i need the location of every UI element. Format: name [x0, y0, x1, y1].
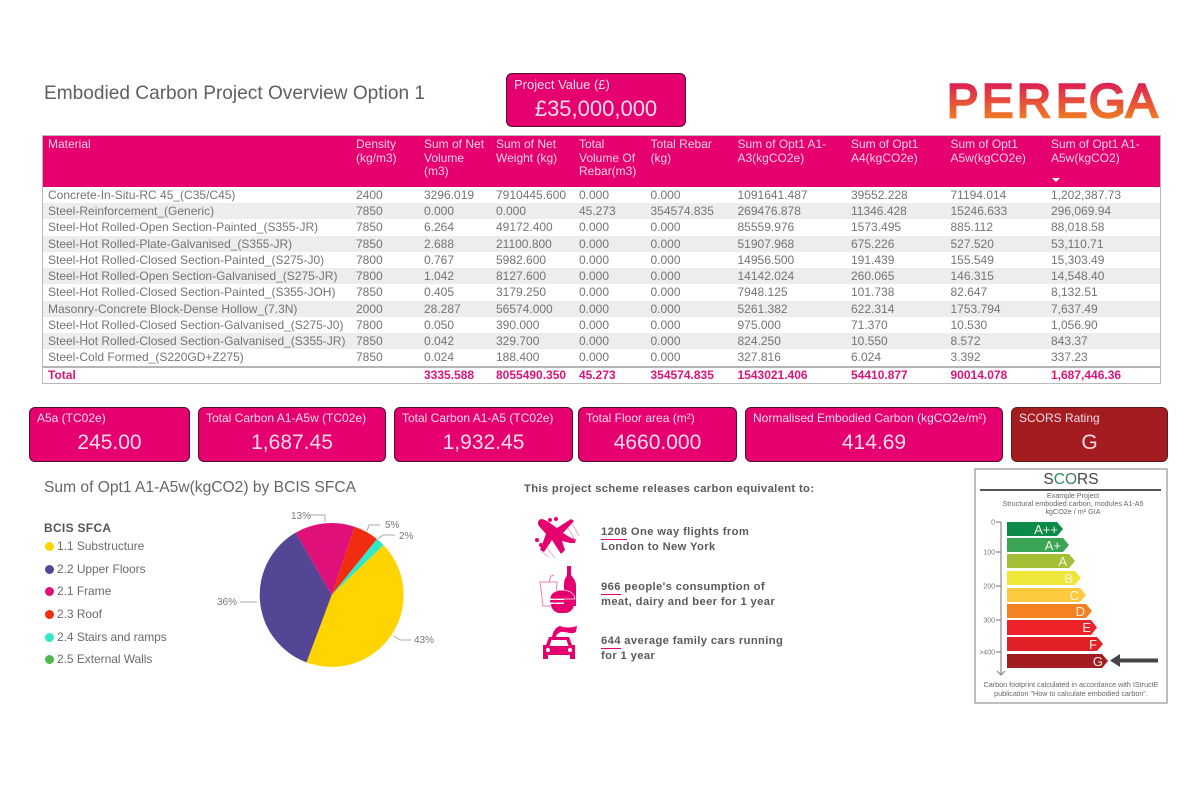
table rows: 7850: [356, 334, 383, 348]
table rows: 11346.428: [851, 204, 907, 218]
card: A5a: 245.00: [77, 431, 142, 454]
rating bars: B: [1064, 571, 1073, 586]
table rows: 7800: [356, 268, 383, 282]
panel: SCORS rating chart: Structural embodied carbon, modules A1-A5: [1002, 499, 1144, 508]
table rows: 2.688: [424, 236, 454, 250]
table rows: 7800: [356, 318, 383, 332]
table header: Sum of Opt1 A5w(kgCO2e): [950, 137, 1026, 164]
card: total floor area: 4660.000: [614, 431, 701, 454]
table rows: 824.250: [738, 334, 781, 348]
card: total carbon A1-A5w: Total Carbon A1-A5w (TC02e): [206, 411, 366, 425]
panel: SCORS rating chart: 200: [983, 584, 995, 590]
table rows: Masonry-Concrete Block-Dense Hollow_(7.3N): [48, 302, 297, 316]
rating bars: [1007, 522, 1108, 669]
card: project value: £35,000,000: [535, 96, 657, 120]
table rows: 1,056.90: [1051, 318, 1098, 332]
panel: SCORS rating chart: 0: [991, 520, 995, 526]
axis: [996, 522, 1005, 675]
table rows: 8,132.51: [1051, 284, 1098, 298]
table rows: 101.738: [851, 284, 894, 298]
table rows: 329.700: [496, 334, 539, 348]
table rows: 0.000: [650, 318, 681, 332]
legend: [44, 521, 167, 666]
card: project value: Project Value (£): [514, 76, 610, 92]
table rows: 0.767: [424, 252, 454, 266]
table rows: Steel-Cold Formed_(S220GD+Z275): [48, 350, 244, 364]
equivalent: flights: One way flights from: [631, 526, 749, 538]
table rows: 1.042: [424, 268, 454, 282]
panel: materials table border: [42, 135, 1161, 384]
table rows: 0.000: [579, 284, 609, 298]
table rows: 188.400: [496, 350, 539, 364]
table rows: Steel-Hot Rolled-Plate-Galvanised_(S355-JR): [48, 236, 292, 250]
table rows: 0.000: [579, 268, 609, 282]
table rows: 14956.500: [738, 252, 794, 266]
table rows: 296,069.94: [1051, 204, 1111, 218]
table rows: 45.273: [579, 204, 616, 218]
rating bars: D: [1076, 604, 1085, 619]
table rows: 7800: [356, 252, 383, 266]
table rows: 1091641.487: [738, 188, 808, 202]
table rows: 0.000: [579, 236, 609, 250]
rating bars: F: [1089, 637, 1097, 652]
card: total floor area: [578, 407, 737, 462]
pie chart: 2%: [399, 531, 414, 542]
table rows: 260.065: [851, 268, 894, 282]
table rows: 0.000: [579, 220, 609, 234]
card: SCORS rating: G: [1081, 431, 1098, 454]
table rows: 8.572: [950, 334, 981, 348]
pie chart heading: Sum of Opt1 A1-A5w(kgCO2) by BCIS SFCA: [44, 478, 356, 496]
table rows: 3179.250: [496, 284, 546, 298]
table rows: 7850: [356, 204, 383, 218]
card: total carbon A1-A5w: [198, 407, 386, 462]
table rows: 39552.228: [851, 188, 908, 202]
table rows: Steel-Hot Rolled-Closed Section-Galvanised_(S275-J0): [48, 318, 343, 332]
card: SCORS rating: [1011, 407, 1168, 462]
table rows: 28.287: [424, 302, 461, 316]
equivalent: cars: average family cars running: [624, 635, 783, 647]
table rows: 6.024: [851, 350, 881, 364]
carbon equivalents heading: This project scheme releases carbon equivalent to:: [524, 483, 814, 495]
table header: Total Rebar (kg): [650, 137, 712, 164]
table rows: 0.042: [424, 334, 454, 348]
table header: Sum of Opt1 A1-A5w(kgCO2): [1051, 137, 1140, 164]
table rows: Steel-Hot Rolled-Open Section-Galvanised_(S275-JR): [48, 268, 337, 282]
table rows: Steel-Hot Rolled-Closed Section-Galvanised_(S355-JR): [48, 334, 345, 348]
rating bars: E: [1082, 620, 1091, 635]
table rows: Steel-Reinforcement_(Generic): [48, 204, 214, 218]
table rows: [43, 188, 1160, 364]
card: project value: [506, 73, 686, 127]
table rows: 14,548.40: [1051, 268, 1104, 282]
table total row: 354574.835: [650, 368, 714, 382]
card: total carbon A1-A5: [394, 407, 573, 462]
table rows: 0.000: [650, 220, 681, 234]
pie chart: 43%: [414, 635, 434, 646]
table rows: Steel-Hot Rolled-Closed Section-Painted_(S355-JOH): [48, 284, 335, 298]
table total row: 1,687,446.36: [1051, 368, 1121, 382]
table rows: 71194.014: [950, 188, 1006, 202]
table rows: 8127.600: [496, 268, 546, 282]
table rows: 88,018.58: [1051, 220, 1104, 234]
pie chart: 5%: [385, 520, 400, 531]
panel: SCORS rating chart: 300: [983, 618, 995, 624]
table rows: 191.439: [851, 252, 894, 266]
table rows: 1,202,387.73: [1051, 188, 1121, 202]
table header: Sum of Net Weight (kg): [496, 137, 557, 164]
table rows: 0.024: [424, 350, 454, 364]
table total row: 8055490.350: [496, 368, 566, 382]
table rows: 390.000: [496, 318, 539, 332]
table rows: Steel-Hot Rolled-Open Section-Painted_(S355-JR): [48, 220, 318, 234]
panel: SCORS rating chart: 100: [983, 550, 995, 556]
panel: SCORS rating chart: [974, 468, 1168, 704]
table rows: 7850: [356, 220, 383, 234]
table total row: [48, 368, 1121, 382]
table rows: 0.000: [650, 302, 681, 316]
table rows: 10.530: [950, 318, 987, 332]
table rows: 354574.835: [650, 204, 714, 218]
table rows: 53,110.71: [1051, 236, 1104, 250]
table rows: 2000: [356, 302, 383, 316]
table rows: 51907.968: [738, 236, 794, 250]
table rows: 49172.400: [496, 220, 553, 234]
table rows: 7850: [356, 350, 383, 364]
card: normalised embodied carbon: [745, 407, 1003, 462]
table rows: 7,637.49: [1051, 302, 1098, 316]
table header: Total Volume Of Rebar(m3): [579, 137, 636, 178]
table rows: 0.000: [579, 318, 609, 332]
card: normalised embodied carbon: Normalised Embodied Carbon (kgCO2e/m²): [753, 411, 986, 425]
table header: Material: [48, 137, 91, 151]
card: total floor area: Total Floor area (m²): [586, 411, 695, 425]
table header: Sum of Net Volume (m3): [424, 137, 484, 178]
materials table: [43, 136, 1160, 382]
legend item: stairs and ramps: 2.4 Stairs and ramps: [57, 630, 167, 644]
table rows: 0.000: [650, 350, 681, 364]
table rows: 0.000: [650, 268, 681, 282]
table header: Sum of Opt1 A1-A3(kgCO2e): [738, 137, 826, 164]
table rows: 269476.878: [738, 204, 801, 218]
panel: SCORS rating chart: kgCO2e / m² GIA: [1045, 507, 1101, 516]
table rows: 0.000: [579, 188, 609, 202]
table rows: 2400: [356, 188, 383, 202]
table rows: 0.050: [424, 318, 454, 332]
table rows: 0.000: [650, 284, 681, 298]
table rows: 337.23: [1051, 350, 1088, 364]
equivalent: flights: 1208: [601, 526, 627, 538]
title: Embodied Carbon Project Overview Option 1: [44, 83, 425, 104]
table rows: 327.816: [738, 350, 781, 364]
table rows: 56574.000: [496, 302, 553, 316]
table rows: 7910445.600: [496, 188, 566, 202]
icon: food and drink: [539, 566, 576, 613]
table rows: 5261.382: [738, 302, 788, 316]
table rows: 1753.794: [950, 302, 1001, 316]
table rows: 7850: [356, 284, 383, 298]
equivalent: flights: [601, 526, 749, 553]
card: total carbon A1-A5w: 1,687.45: [251, 431, 333, 454]
table rows: 82.647: [950, 284, 987, 298]
card: A5a: A5a (TC02e): [37, 411, 106, 425]
table header: [43, 136, 1160, 187]
table rows: 6.264: [424, 220, 454, 234]
equivalent: food consumption: people's consumption of: [624, 581, 765, 593]
legend item: roof: 2.3 Roof: [57, 607, 102, 621]
rating bars: G: [1093, 654, 1103, 669]
table rows: 7850: [356, 236, 383, 250]
table rows: 0.000: [579, 252, 609, 266]
table rows: 85559.976: [738, 220, 794, 234]
table rows: 14142.024: [738, 268, 794, 282]
table rows: Concrete-In-Situ-RC 45_(C35/C45): [48, 188, 235, 202]
pie chart: 36%: [217, 597, 237, 608]
card: normalised embodied carbon: 414.69: [842, 431, 906, 454]
table rows: 3296.019: [424, 188, 474, 202]
table rows: 15246.633: [950, 204, 1007, 218]
table total row: 54410.877: [851, 368, 908, 382]
rating bars: A: [1058, 554, 1067, 569]
icon: car with exhaust: [543, 626, 577, 659]
table rows: 0.000: [650, 334, 681, 348]
table rows: 21100.800: [496, 236, 552, 250]
equivalent: cars: [601, 635, 783, 662]
table rows: 0.000: [579, 334, 609, 348]
table rows: 885.112: [950, 220, 993, 234]
rating bars: C: [1070, 588, 1079, 603]
icon: airplane: [535, 517, 580, 558]
panel: SCORS rating chart: publication "How to calculate embodied carbon".: [994, 689, 1148, 698]
equivalent: cars: 644: [601, 635, 621, 647]
table total row: 1543021.406: [738, 368, 808, 382]
legend title: BCIS SFCA: [44, 521, 111, 535]
table rows: 5982.600: [496, 252, 546, 266]
table rows: 10.550: [851, 334, 888, 348]
pie chart: [217, 511, 434, 667]
table rows: 155.549: [950, 252, 994, 266]
card: SCORS rating: SCORS Rating: [1019, 411, 1100, 425]
table rows: 527.520: [950, 236, 994, 250]
table total row: Total: [48, 368, 76, 382]
rating bars: A++: [1034, 522, 1058, 537]
legend item: frame: 2.1 Frame: [57, 584, 111, 598]
table rows: 843.37: [1051, 334, 1088, 348]
table rows: 0.000: [579, 350, 609, 364]
table header: Sum of Opt1 A4(kgCO2e): [851, 137, 918, 164]
table rows: 0.000: [650, 236, 681, 250]
table total row: 90014.078: [950, 368, 1007, 382]
legend item: external walls: 2.5 External Walls: [57, 652, 152, 666]
card: total carbon A1-A5: Total Carbon A1-A5 (TC02e): [402, 411, 553, 425]
legend item: substructure: 1.1 Substructure: [57, 539, 144, 553]
equivalent: food consumption: 966: [601, 581, 621, 593]
equivalent: cars: for 1 year: [601, 650, 655, 662]
table rows: 0.000: [650, 252, 681, 266]
panel: SCORS rating chart: Example Project: [1047, 491, 1099, 500]
rating bars: A+: [1045, 538, 1061, 553]
panel: SCORS rating chart: >400: [979, 650, 995, 656]
table rows: 0.000: [496, 204, 526, 218]
table rows: Steel-Hot Rolled-Closed Section-Painted_(S275-J0): [48, 252, 324, 266]
table rows: 0.000: [650, 188, 681, 202]
card: A5a: [29, 407, 190, 462]
equivalent: food consumption: meat, dairy and beer for 1 year: [601, 596, 775, 608]
table rows: 0.405: [424, 284, 454, 298]
panel: SCORS rating chart: SCORS: [1043, 471, 1099, 488]
legend item: upper floors: 2.2 Upper Floors: [57, 562, 146, 576]
equivalent: food consumption: [601, 581, 775, 608]
table rows: 1573.495: [851, 220, 901, 234]
table rows: 71.370: [851, 318, 888, 332]
table rows: 975.000: [738, 318, 781, 332]
equivalent: flights: London to New York: [601, 541, 716, 553]
table header: Density (kg/m3): [356, 137, 397, 164]
table rows: 7948.125: [738, 284, 788, 298]
table rows: 15,303.49: [1051, 252, 1104, 266]
card: total carbon A1-A5: 1,932.45: [443, 431, 524, 454]
table total row: 3335.588: [424, 368, 474, 382]
pie chart: 13%: [291, 511, 311, 522]
table rows: 622.314: [851, 302, 894, 316]
table rows: 3.392: [950, 350, 981, 364]
arrow: G rating marker: [1110, 654, 1158, 667]
table rows: 0.000: [579, 302, 609, 316]
table rows: 146.315: [950, 268, 994, 282]
table rows: 0.000: [424, 204, 454, 218]
panel: SCORS rating chart: Carbon footprint calculated in accordance with IStructE: [984, 680, 1159, 689]
table rows: 675.226: [851, 236, 894, 250]
table total row: 45.273: [579, 368, 616, 382]
